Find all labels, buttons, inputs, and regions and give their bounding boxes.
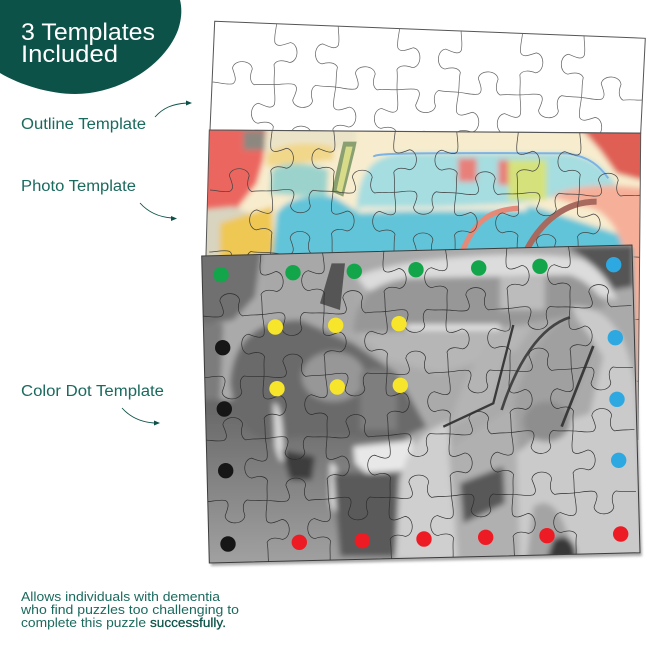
title text: 3 Templates — [21, 19, 155, 46]
caption: complete this puzzle — [21, 615, 146, 630]
label: photo template: Photo Template — [21, 178, 136, 195]
label: color dot template: Color Dot Template — [21, 383, 164, 400]
title badge — [0, 0, 181, 94]
caption — [20, 589, 239, 630]
caption: Allows individuals with dementia — [21, 589, 221, 604]
caption: who find puzzles too challenging to — [20, 602, 239, 617]
caption: successfully. — [150, 615, 226, 630]
sheet: photo template — [206, 130, 642, 440]
photo: colorful vintage cars — [206, 130, 640, 422]
arrow: color dot template — [122, 408, 160, 426]
puzzle outline: outline sheet — [212, 24, 642, 132]
dots: yellow grid — [268, 316, 408, 396]
dots: green row — [213, 259, 548, 282]
sheet: outline template — [210, 20, 646, 134]
arrow: outline template — [155, 100, 192, 117]
dots: black column — [215, 340, 236, 552]
arrow: photo template — [140, 203, 177, 221]
border: photo sheet — [204, 130, 641, 440]
label: outline template: Outline Template — [21, 116, 146, 133]
title text — [21, 19, 155, 68]
dots: blue column — [606, 257, 626, 468]
sheet: color dot template — [193, 240, 650, 573]
photo: grayscale vintage cars — [193, 240, 650, 573]
puzzle outline: color dot sheet — [199, 244, 638, 564]
title text: Included — [21, 41, 118, 68]
border: color dot sheet — [202, 245, 640, 563]
puzzle outline: photo sheet — [209, 130, 640, 382]
dots: red row — [292, 526, 628, 550]
sheet shadow — [203, 248, 642, 566]
